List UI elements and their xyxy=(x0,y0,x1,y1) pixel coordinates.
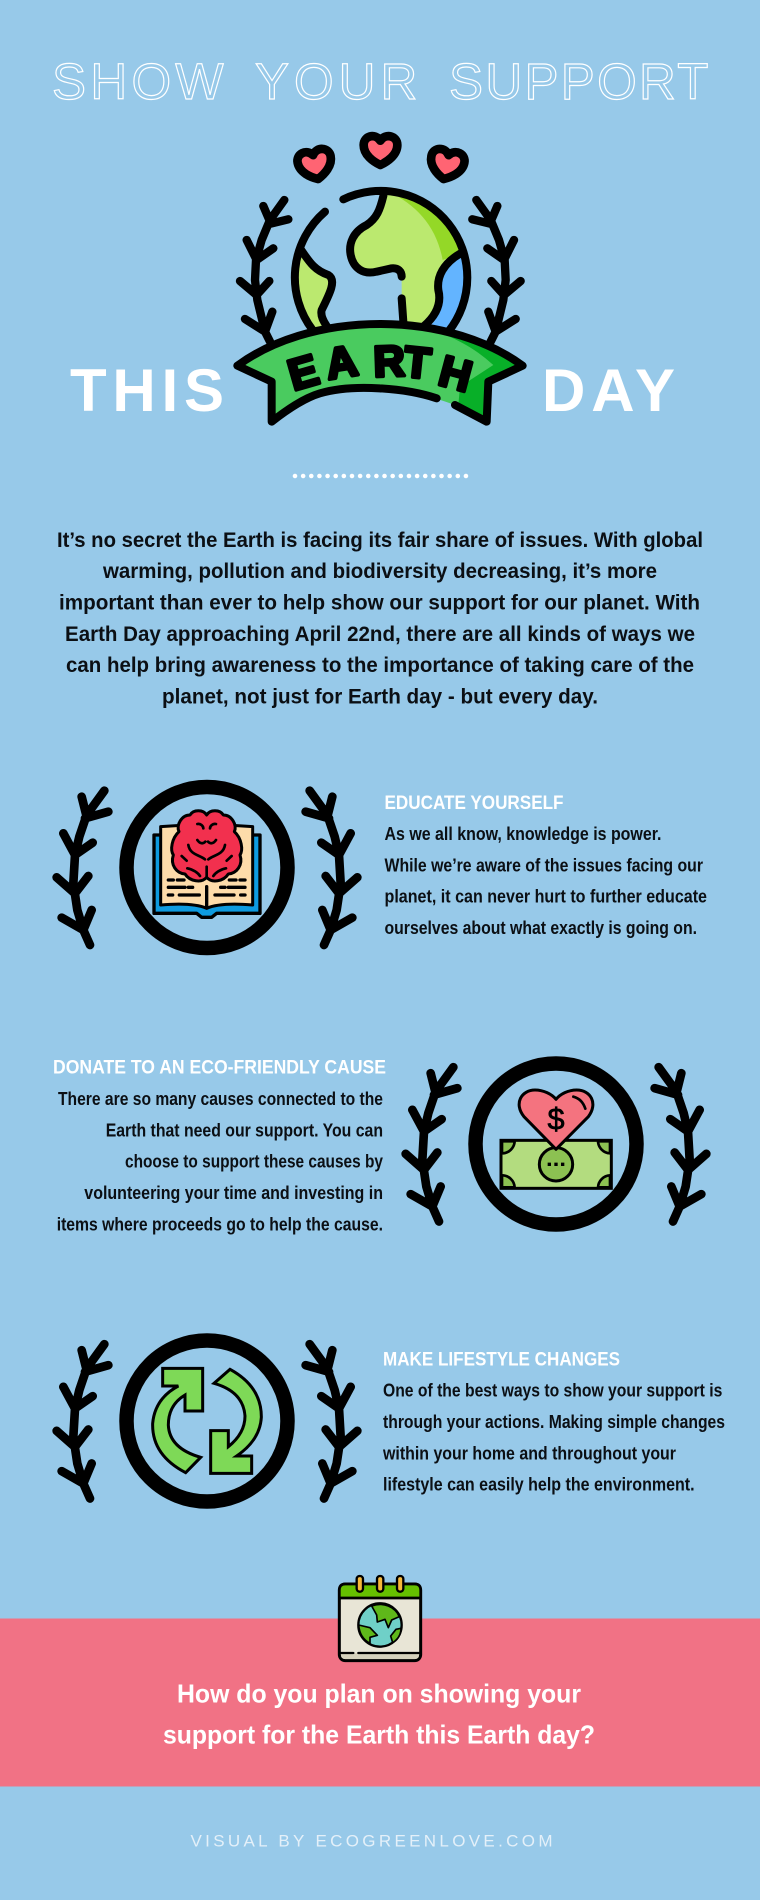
intro paragraph: can help bring awareness to the importance of taking care of the xyxy=(66,653,694,677)
icon: green banner xyxy=(237,324,523,422)
heading: donate: DONATE TO AN ECO-FRIENDLY CAUSE xyxy=(53,1056,386,1078)
icon: calendar with globe xyxy=(339,1576,421,1661)
calendar body xyxy=(339,1584,421,1661)
text block: educate yourself: planet, it can never hurt to further educate xyxy=(384,886,707,907)
icon: earth emblem with hearts, laurels and banner xyxy=(237,136,523,422)
dollar sign: $ xyxy=(547,1102,565,1136)
title word: this: THIS xyxy=(70,357,224,424)
title: show your support: SUPPORT xyxy=(449,53,711,110)
text block: donate: items where proceeds go to help the cause. xyxy=(57,1213,383,1234)
left arrow xyxy=(153,1368,203,1473)
text block: donate: There are so many causes connected to the xyxy=(58,1088,383,1109)
panel: pink call-to-action band xyxy=(0,1618,760,1786)
coin xyxy=(539,1148,573,1181)
text block: educate yourself: ourselves about what exactly is going on. xyxy=(384,917,697,938)
icon: banner outline xyxy=(237,324,523,422)
icon: right laurel xyxy=(472,200,521,342)
calendar bottom line xyxy=(341,1649,419,1656)
panel: educate yourself wreath xyxy=(57,787,357,948)
text block: educate yourself xyxy=(384,823,707,938)
banknote corners xyxy=(502,1141,610,1187)
call-to-action text xyxy=(163,1679,595,1750)
heart highlight xyxy=(573,1097,585,1109)
icon: land shading xyxy=(388,191,461,260)
book text lines xyxy=(168,880,245,907)
banner lettering: EARTH xyxy=(283,337,477,402)
icon: heart over banknote xyxy=(501,1090,611,1188)
text block: donate: Earth that need our support. You can xyxy=(106,1119,383,1140)
text block: lifestyle xyxy=(382,1380,725,1495)
calendar rings xyxy=(357,1576,403,1592)
dotted divider xyxy=(295,474,466,478)
icon: left laurel xyxy=(240,200,288,342)
book cover xyxy=(154,835,260,917)
coin dots xyxy=(548,1163,564,1166)
icon: recycle arrows xyxy=(153,1368,261,1473)
calendar header xyxy=(339,1584,421,1598)
intro paragraph xyxy=(57,528,703,708)
title word: day: DAY xyxy=(542,357,675,424)
icon: ocean on the right of the globe xyxy=(428,253,465,332)
icon: banner shadow xyxy=(427,328,523,422)
heading: lifestyle: MAKE LIFESTYLE CHANGES xyxy=(383,1348,620,1370)
globe land xyxy=(359,1604,401,1643)
brain xyxy=(172,811,242,881)
intro paragraph: warming, pollution and biodiversity decreasing, it’s more xyxy=(102,559,657,583)
intro paragraph: Earth Day approaching April 22nd, there are all kinds of ways we xyxy=(65,622,695,646)
icon: globe outlines xyxy=(295,191,467,332)
call-to-action text: support for the Earth this Earth day? xyxy=(163,1720,595,1750)
globe xyxy=(358,1603,402,1647)
icon: three hearts xyxy=(296,136,466,183)
title: show your support: SHOW xyxy=(52,53,228,110)
text block: donate xyxy=(57,1088,384,1234)
footer credit: VISUAL BY ECOGREENLOVE.COM xyxy=(190,1832,552,1851)
text block: lifestyle: within your home and throughout your xyxy=(382,1442,676,1463)
heading: educate yourself: EDUCATE YOURSELF xyxy=(384,792,564,814)
call-to-action text: How do you plan on showing your xyxy=(177,1679,581,1709)
panel: lifestyle wreath xyxy=(57,1340,357,1502)
intro paragraph: It’s no secret the Earth is facing its fair share of issues. With global xyxy=(57,528,703,552)
icon: brain on open book xyxy=(154,811,260,917)
book pages xyxy=(161,825,253,908)
right arrow xyxy=(211,1369,261,1473)
icon: main land mass xyxy=(350,191,461,325)
text block: educate yourself: As we all know, knowledge is power. xyxy=(384,823,662,844)
text block: donate: volunteering your time and investing in xyxy=(84,1182,383,1203)
panel: donate wreath xyxy=(406,1064,706,1224)
intro paragraph: important than ever to help show our support for our planet. With xyxy=(59,590,700,614)
icon: left land mass xyxy=(295,248,332,331)
banknote xyxy=(501,1140,611,1188)
calendar bottom strip xyxy=(341,1653,419,1659)
text block: donate: choose to support these causes by xyxy=(125,1151,384,1172)
text block: educate yourself: While we’re aware of the issues facing our xyxy=(384,854,703,875)
intro paragraph: planet, not just for Earth day - but every day. xyxy=(162,684,598,708)
title: show your support: YOUR xyxy=(255,53,422,110)
text block: lifestyle: lifestyle can easily help the environment. xyxy=(383,1474,695,1495)
heart xyxy=(519,1090,593,1149)
brain folds xyxy=(182,824,232,877)
